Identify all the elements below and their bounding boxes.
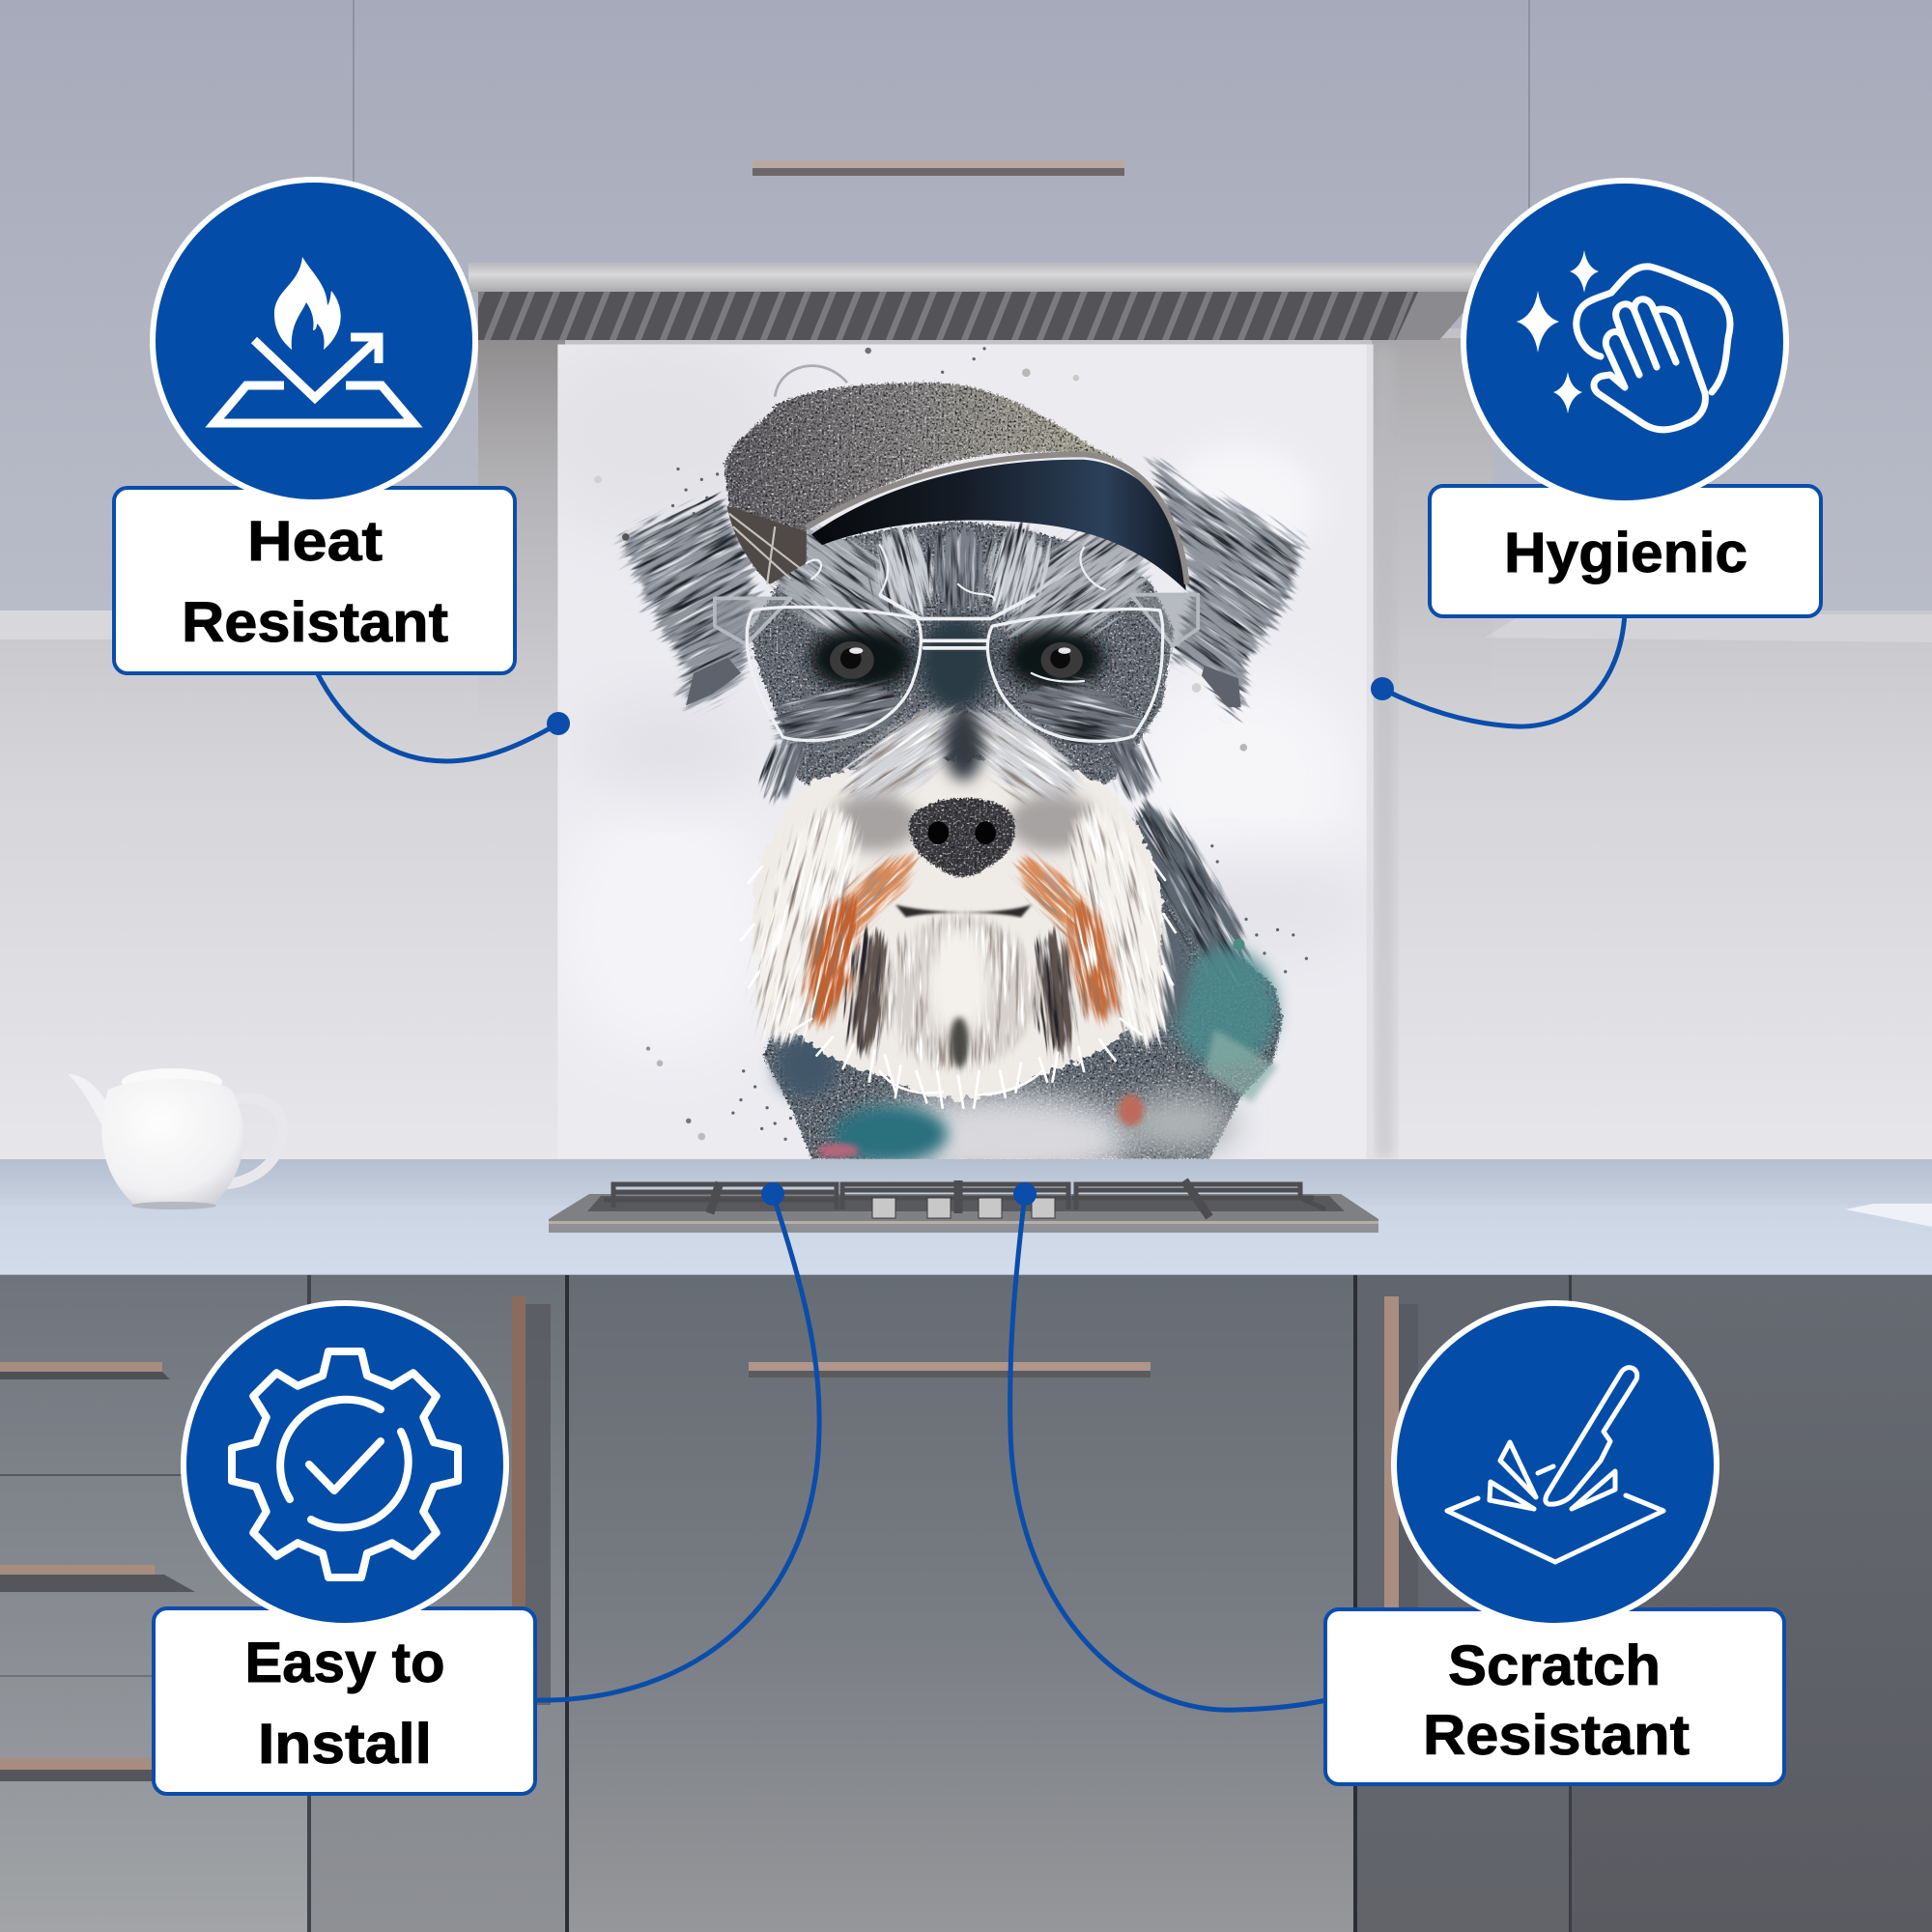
label box <box>154 1608 535 1794</box>
icon badge circle <box>153 180 475 502</box>
upper cabinet handle <box>753 160 1124 176</box>
nose <box>909 798 1015 877</box>
icon: hand wiping with sparkles <box>1517 250 1730 430</box>
splashback panel with schnauzer artwork <box>557 344 1374 1159</box>
callout: easy to install <box>154 1182 819 1794</box>
callout: heat resistant <box>114 180 570 761</box>
label text: Easy to <box>245 1632 444 1694</box>
panel background <box>557 344 1374 1109</box>
icon badge circle <box>184 1303 506 1626</box>
label text <box>182 510 448 654</box>
label text <box>1423 1634 1690 1767</box>
head fur <box>749 505 1174 802</box>
left burner grate <box>604 1182 837 1213</box>
left temple <box>715 598 790 644</box>
label box <box>114 488 515 673</box>
gas hob <box>549 1180 1378 1233</box>
callout: hygienic <box>1371 181 1821 726</box>
label text: Resistant <box>182 591 448 654</box>
tiled wall <box>0 328 1932 1161</box>
right temple <box>1131 595 1198 646</box>
mouth <box>895 904 1032 917</box>
callout: scratch resistant <box>1010 1182 1784 1784</box>
label text: Scratch <box>1448 1634 1661 1697</box>
left lens <box>747 607 921 740</box>
connector line <box>316 670 570 761</box>
connector line <box>1371 612 1625 726</box>
ear tips <box>686 658 1241 707</box>
icon: gear with check mark <box>232 1351 458 1577</box>
chest and coat <box>763 794 1283 1186</box>
label box <box>1430 486 1821 616</box>
label text: Heat <box>247 510 383 573</box>
hob knobs <box>872 1198 1055 1218</box>
label text: Resistant <box>1423 1704 1690 1767</box>
glasses <box>715 545 1198 741</box>
icon badge circle <box>1463 181 1786 503</box>
connector line <box>536 1182 819 1700</box>
teapot <box>68 1068 282 1209</box>
paint splatter <box>594 348 1306 1140</box>
icon badge circle <box>1394 1303 1717 1626</box>
upper cabinets <box>0 0 1932 618</box>
right ear <box>1142 456 1311 724</box>
icon: flame over reflecting surface <box>214 257 413 423</box>
right burner grate <box>1072 1180 1325 1217</box>
eyes <box>830 641 1083 679</box>
cabinet handles <box>0 1296 1418 1781</box>
label text: Install <box>258 1713 432 1776</box>
label text <box>245 1632 444 1776</box>
bridge <box>881 596 1035 648</box>
flat cap <box>725 366 1187 590</box>
connector line <box>1010 1182 1326 1710</box>
beard <box>737 695 1188 1108</box>
right lens <box>987 609 1163 741</box>
icon: knife scratching a surface <box>1447 1368 1663 1562</box>
left ear <box>612 491 766 713</box>
kitchen counter <box>0 1159 1932 1276</box>
lower cabinets <box>0 1275 1932 1932</box>
extractor hood <box>469 263 1478 340</box>
label box <box>1325 1609 1784 1784</box>
label text: Hygienic <box>1504 522 1747 584</box>
middle burner grate <box>842 1180 1068 1213</box>
